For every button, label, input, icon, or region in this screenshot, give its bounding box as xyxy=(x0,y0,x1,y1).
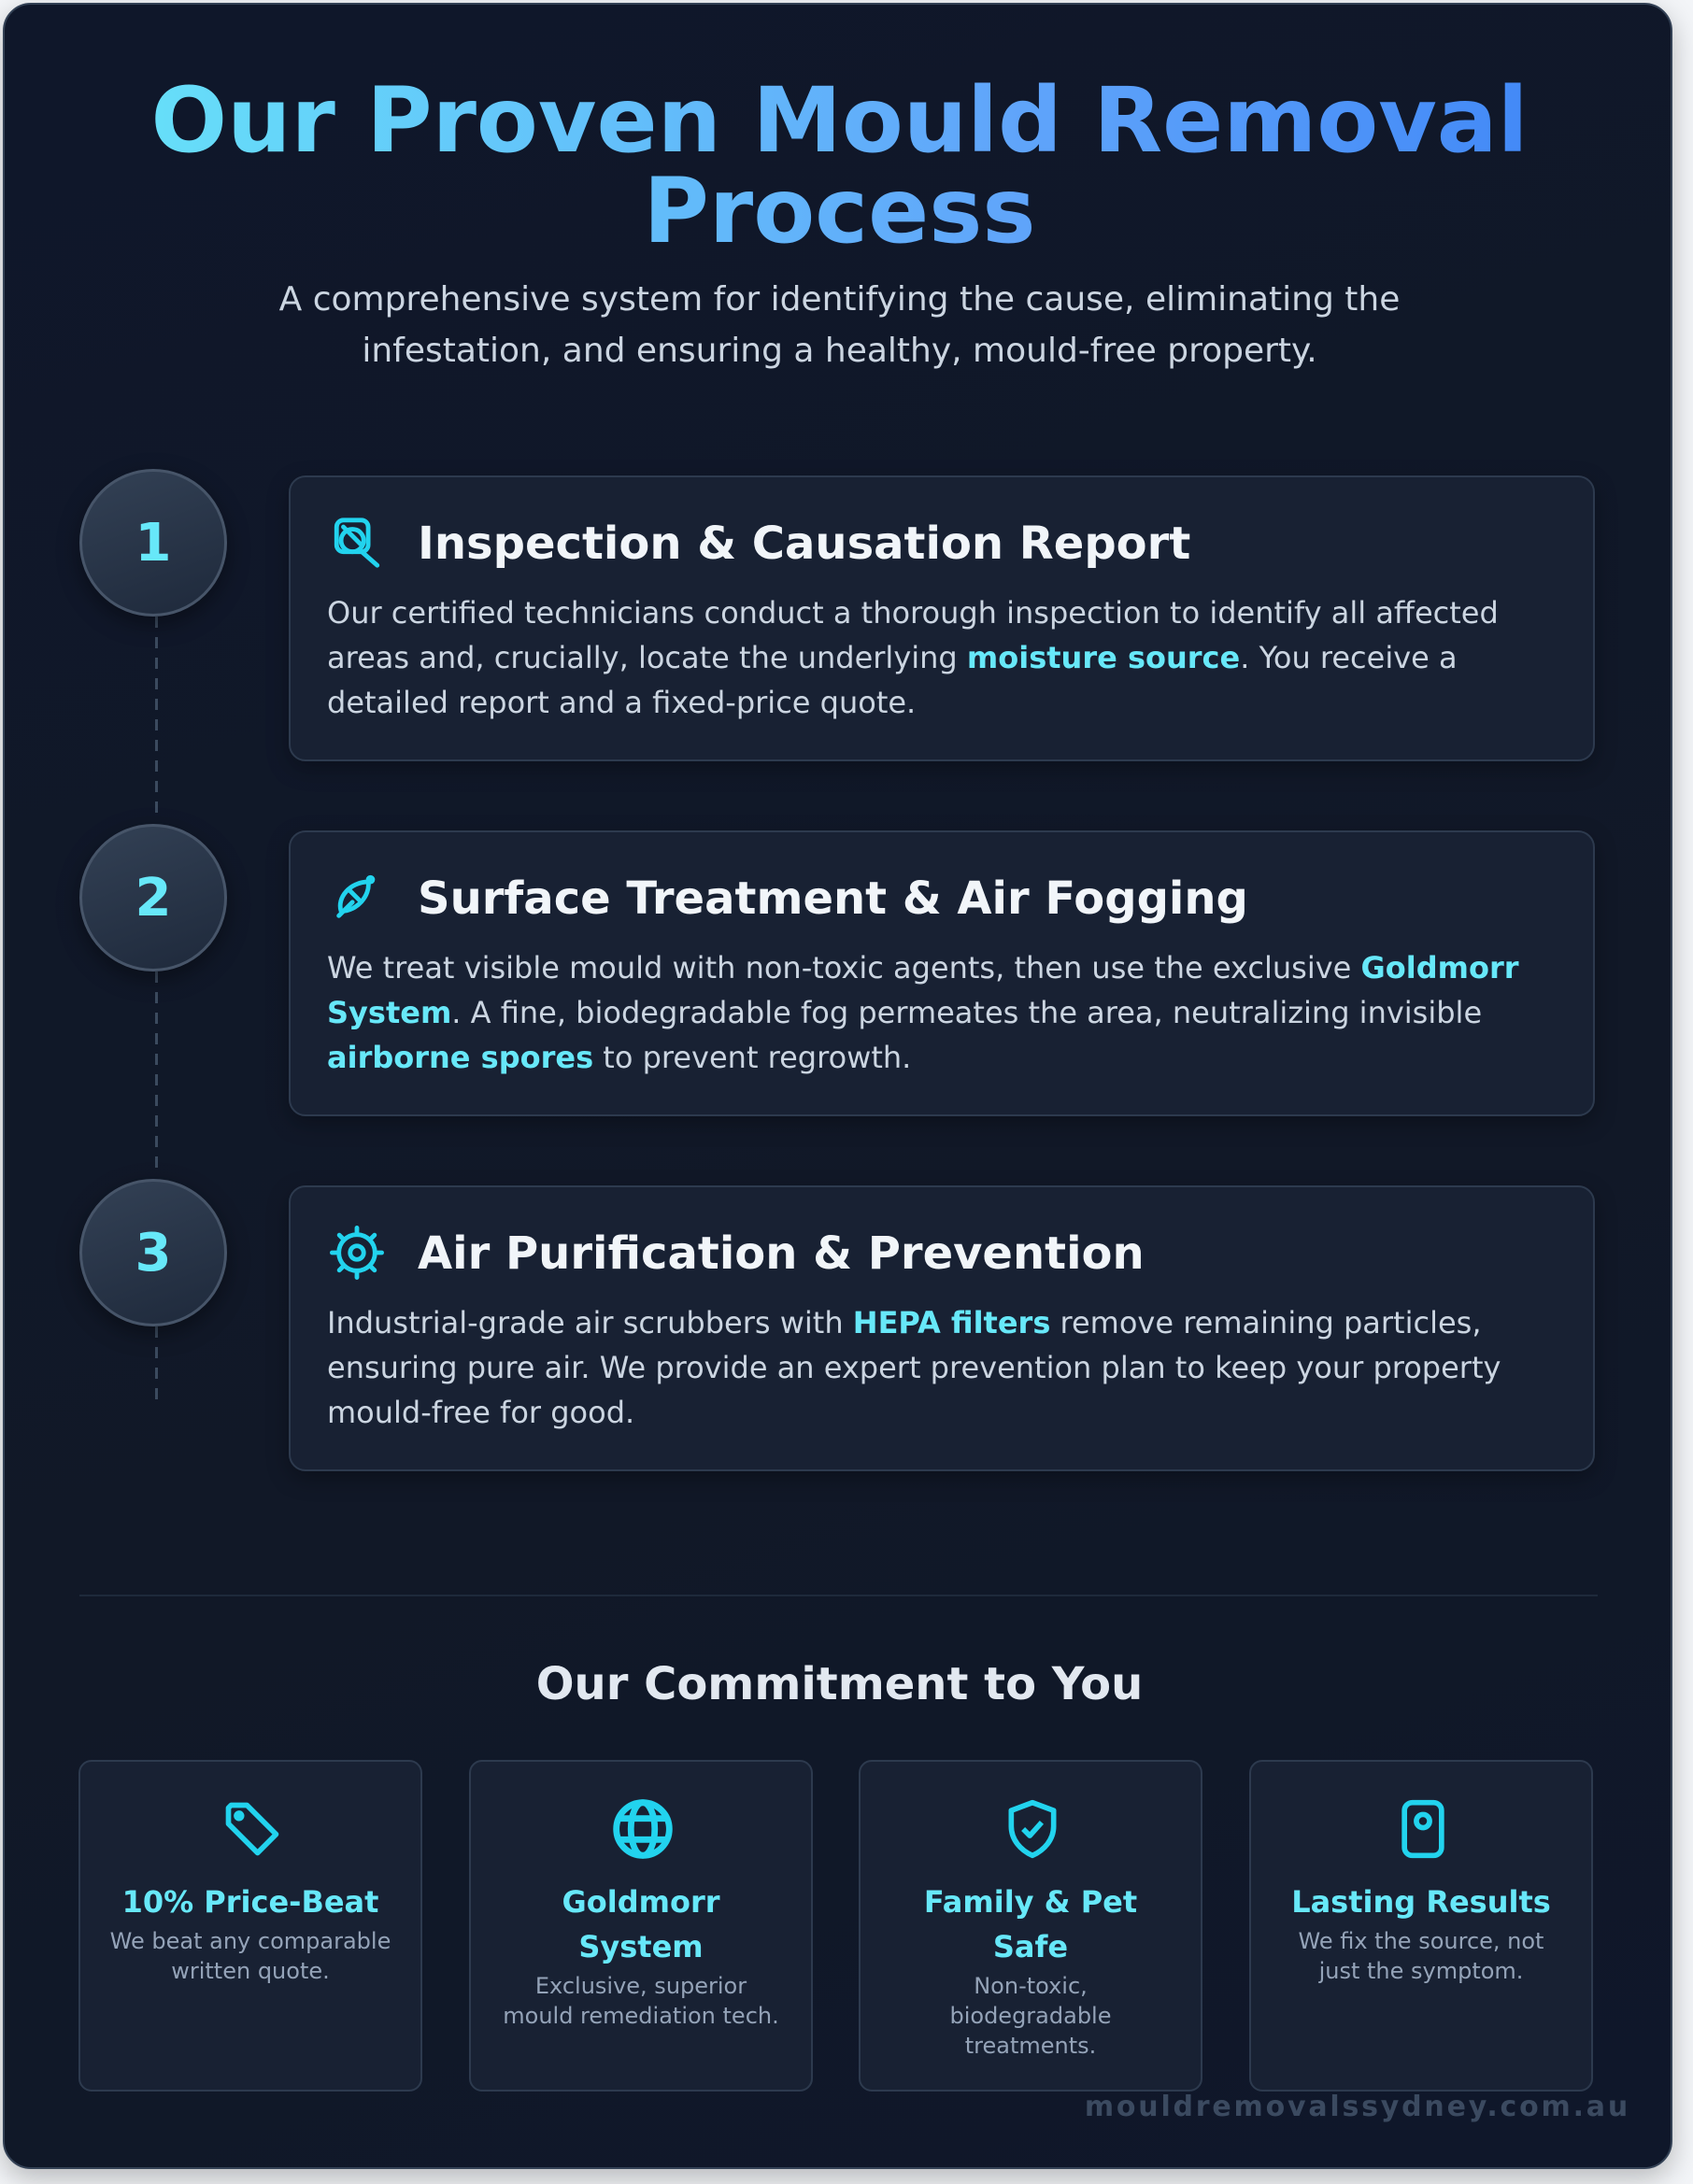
card title xyxy=(562,1884,719,1964)
icon: spray xyxy=(336,874,376,918)
card title: Lasting Results xyxy=(1291,1884,1551,1920)
commitment card: goldmorr xyxy=(469,1760,813,2092)
text: Our certified technicians conduct a thorough inspection to identify all affected areas and, crucially, locate the underlying moisture source. You receive a detailed report and a fixed-price quote. xyxy=(327,595,1499,720)
panel: step 1 xyxy=(289,475,1595,761)
card title xyxy=(924,1884,1137,1964)
title: Our Proven Mould Removal xyxy=(151,68,1528,173)
card title: Goldmorr xyxy=(562,1884,719,1920)
card text: biodegradable xyxy=(949,2003,1112,2029)
subtitle xyxy=(279,280,1400,370)
panel: step 2 xyxy=(289,830,1595,1116)
card text xyxy=(949,1973,1112,2059)
card title: Family & Pet xyxy=(924,1884,1137,1920)
title: Process xyxy=(644,159,1035,263)
text: We treat visible mould with non-toxic agents, then use the exclusive Goldmorr System. A fine, biodegradable fog permeates the area, neutralizing invisible airborne spores to prevent regrowth. xyxy=(327,950,1519,1075)
card text: Exclusive, superior mould remediation tech. xyxy=(503,1973,779,2029)
icon: air gear xyxy=(330,1226,384,1280)
step circle 3 xyxy=(79,1179,227,1326)
icon: globe xyxy=(613,1799,673,1859)
panel: step 3 xyxy=(289,1185,1595,1471)
step circle 1: 1 xyxy=(135,512,171,574)
timeline connector 1 xyxy=(155,617,158,822)
icon: shield xyxy=(1009,1799,1056,1859)
title xyxy=(5,76,1674,257)
step circle 2 xyxy=(79,824,227,971)
card title: System xyxy=(578,1929,704,1964)
commitment heading: Our Commitment to You xyxy=(536,1658,1143,1710)
step circle 3: 3 xyxy=(135,1222,171,1283)
footer url: mouldremovalssydney.com.au xyxy=(1085,2091,1630,2123)
heading: Inspection & Causation Report xyxy=(418,518,1190,570)
commitment card: lasting xyxy=(1249,1760,1593,2092)
subtitle: A comprehensive system for identifying the cause, eliminating the xyxy=(279,280,1400,319)
timeline connector 3 xyxy=(155,1326,158,1401)
step circle 2: 2 xyxy=(135,867,171,929)
commitment card: price beat xyxy=(78,1760,422,2092)
step circle 1 xyxy=(79,469,227,617)
icon: tag xyxy=(226,1803,278,1855)
icon: inspection xyxy=(334,518,379,568)
text: Industrial-grade air scrubbers with HEPA filters remove remaining particles, ensuring pure air. We provide an expert prevention plan to keep your property mould-free for good. xyxy=(327,1305,1501,1430)
icon: device xyxy=(1401,1799,1444,1859)
card text: Non-toxic, xyxy=(974,1973,1088,1999)
timeline connector 2 xyxy=(155,971,158,1177)
commitment card: safe xyxy=(859,1760,1202,2092)
card title: 10% Price-Beat xyxy=(122,1884,378,1920)
subtitle: infestation, and ensuring a healthy, mould-free property. xyxy=(362,332,1317,370)
heading: Air Purification & Prevention xyxy=(418,1227,1145,1280)
card title: Safe xyxy=(993,1929,1068,1964)
card text: treatments. xyxy=(965,2033,1096,2059)
heading: Surface Treatment & Air Fogging xyxy=(418,872,1248,925)
card text: We fix the source, not just the symptom. xyxy=(1299,1928,1544,1984)
card text: We beat any comparable written quote. xyxy=(110,1928,391,1984)
